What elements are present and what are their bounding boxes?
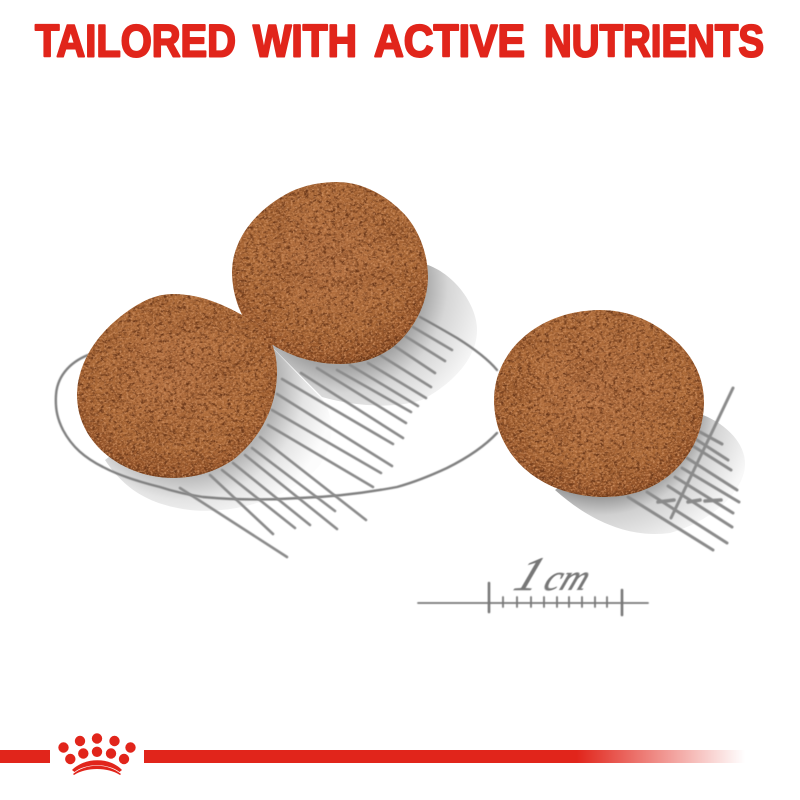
kibble: right <box>494 310 704 497</box>
footer bar right <box>144 750 745 763</box>
icon: crown logo <box>58 733 136 775</box>
title <box>35 15 764 66</box>
hatching: left plate <box>180 327 452 557</box>
title: ACTIVE <box>374 15 525 66</box>
scale ruler <box>418 583 648 615</box>
title: TAILORED <box>35 15 236 66</box>
scale label: cm <box>539 559 596 599</box>
hatching: right scale <box>628 388 739 550</box>
shadow: right kibble <box>555 415 745 534</box>
kibble: back <box>232 182 428 364</box>
title: NUTRIENTS <box>544 15 764 66</box>
scale label: 1 <box>508 548 553 601</box>
sketched ellipse outline <box>56 317 497 499</box>
footer bar left <box>0 750 50 763</box>
shadow: back kibble <box>270 265 477 406</box>
kibble: left <box>77 294 277 478</box>
illustration: kibble group with sketch <box>56 182 745 557</box>
title: WITH <box>253 15 357 66</box>
shadow: left kibble <box>105 340 332 511</box>
